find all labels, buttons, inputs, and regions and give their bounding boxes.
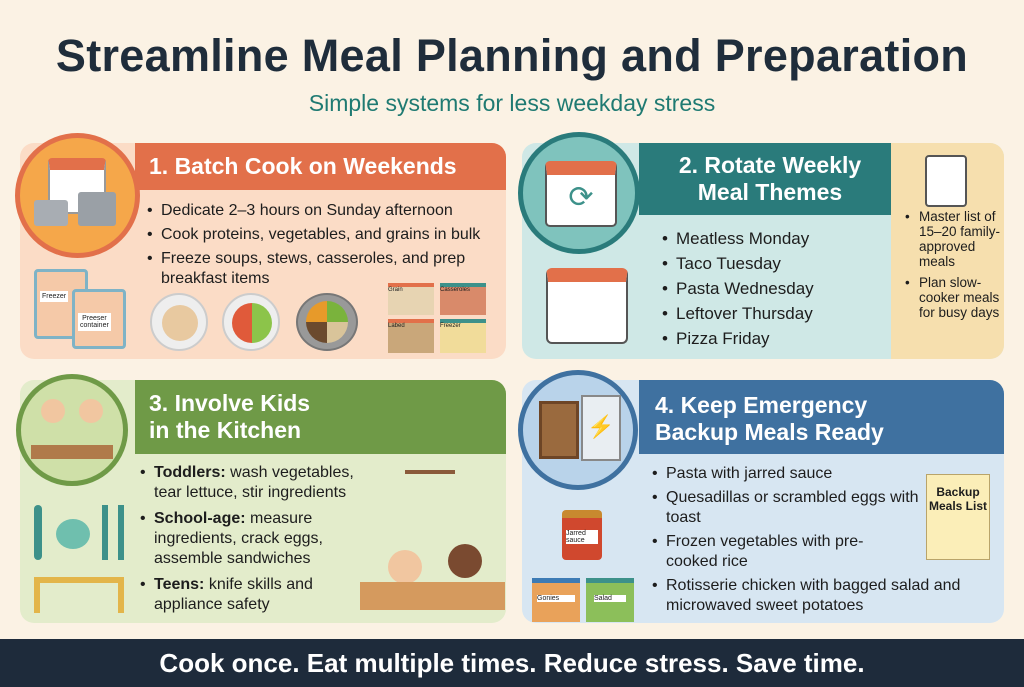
subtitle: Simple systems for less weekday stress [309, 90, 715, 116]
bullets 4: Pasta with jarred sauce [666, 465, 832, 482]
heading 1 [135, 143, 506, 190]
bullets 3 [140, 464, 354, 613]
icon: utensils [34, 505, 124, 613]
bullets 1 [148, 202, 480, 287]
icon: freezer containers: Preeser [82, 315, 107, 322]
icon: freezer containers: container [80, 322, 109, 329]
bullets 2: Pasta Wednesday [676, 279, 814, 298]
icon: jar and containers: Gonies [537, 595, 559, 602]
bullets 3: Toddlers: wash vegetables, tear lettuce, stir ingredients [154, 464, 354, 501]
heading 3: in the Kitchen [149, 417, 301, 443]
icon: pantry fridge circle: ⚡ [587, 414, 615, 439]
icon: jar and containers: Salad [594, 595, 612, 602]
icon: checklist calendar [546, 268, 628, 344]
bullets 1: Freeze soups, stews, casseroles, and prep breakfast items [161, 250, 465, 287]
footer banner: Cook once. Eat multiple times. Reduce stress. Save time. [159, 648, 865, 678]
heading 1: 1. Batch Cook on Weekends [149, 153, 457, 179]
icon: rotating calendar circle [518, 132, 640, 254]
icon: backup meals list note: Backup Meals List [929, 485, 987, 513]
bullets 2: Meatless Monday [676, 229, 809, 248]
bullets 2: Leftover Thursday [676, 304, 813, 323]
icon: calendar and pots circle [15, 133, 140, 258]
icon: clipboard [925, 155, 967, 207]
bullets 3: School-age: measure ingredients, crack eggs, assemble sandwiches [154, 510, 323, 567]
heading 2: 2. Rotate Weekly [679, 152, 861, 178]
bullets 4 [652, 465, 960, 614]
side note column: Plan slow-cooker meals for busy days [919, 275, 999, 320]
icon: kids cooking scene [360, 470, 505, 610]
heading 3: 3. Involve Kids [149, 390, 310, 416]
heading 4: Backup Meals Ready [655, 419, 884, 445]
bullets 1: Cook proteins, vegetables, and grains in bulk [161, 226, 480, 243]
icon: pantry fridge circle [518, 370, 638, 490]
icon: rotating calendar circle: ⟳ [568, 181, 594, 214]
bullets 4: Rotisserie chicken with bagged salad and microwaved sweet potatoes [666, 577, 960, 614]
footer banner [0, 639, 1024, 687]
icon: kids circle [16, 374, 128, 486]
side note column [891, 143, 1004, 359]
icon: plates [150, 293, 358, 351]
panel: emergency meals [522, 380, 1004, 623]
panel: involve kids [20, 380, 506, 623]
icon: backup meals list note [926, 474, 990, 560]
bullets 4: Frozen vegetables with pre-cooked rice [666, 533, 863, 570]
icon: freezer containers: Freezer [42, 293, 66, 300]
icon: labeled containers: Grain [388, 287, 403, 293]
heading 4 [639, 380, 1004, 454]
heading 3 [135, 380, 506, 454]
icon: freezer containers [34, 269, 126, 349]
bullets 4: Quesadillas or scrambled eggs with toast [666, 489, 919, 526]
heading 2 [639, 143, 891, 215]
bullets 2: Pizza Friday [676, 329, 770, 348]
bullets 2 [662, 229, 814, 348]
side note column: Master list of 15–20 family-approved meals [919, 209, 1000, 269]
icon: jar and containers [532, 510, 634, 622]
heading 4: 4. Keep Emergency [655, 392, 867, 418]
bullets 2: Taco Tuesday [676, 254, 781, 273]
bullets 1: Dedicate 2–3 hours on Sunday afternoon [161, 202, 453, 219]
icon: labeled containers: Casseroles [440, 287, 470, 293]
icon: labeled containers: Labed [388, 323, 405, 329]
icon: labeled containers [388, 283, 486, 353]
title: Streamline Meal Planning and Preparation [56, 30, 968, 81]
icon: jar and containers: Jarred sauce [566, 530, 586, 544]
panel: rotate themes [522, 143, 1004, 359]
panel: batch cook [20, 143, 506, 359]
icon: labeled containers: Freezer [440, 323, 461, 329]
heading 2: Meal Themes [698, 179, 842, 205]
bullets 3: Teens: knife skills and appliance safety [154, 576, 313, 613]
